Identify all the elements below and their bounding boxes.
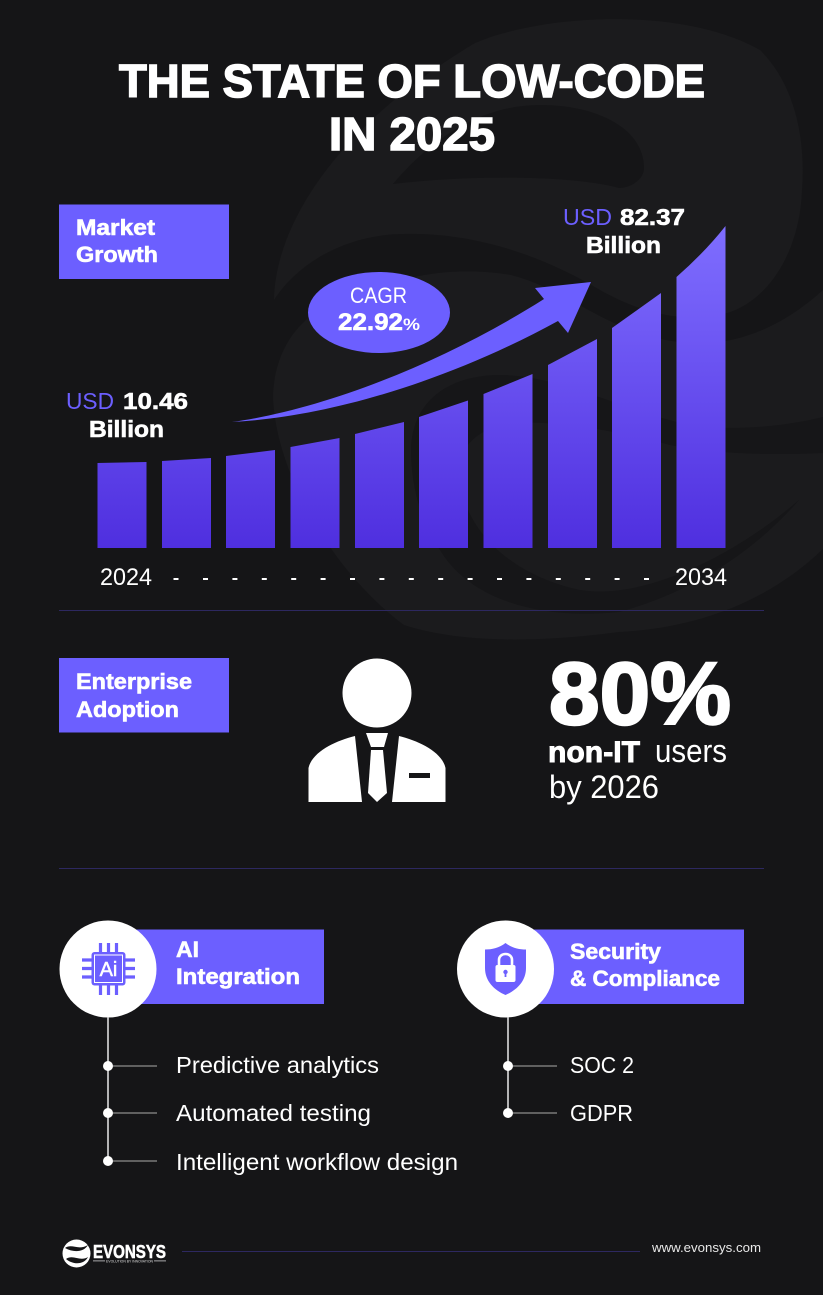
- callout: CAGR: CAGR: [350, 283, 407, 308]
- label: USD 82.37 Billion: Billion: [586, 232, 661, 258]
- heading: AI integration: [130, 930, 324, 1004]
- heading: enterprise adoption: [59, 658, 229, 732]
- heading: enterprise adoption: Enterprise: [76, 669, 192, 694]
- stat: 80% non-IT users by 2026: users: [655, 733, 727, 769]
- callout: CAGR: 22.92: [338, 309, 403, 336]
- icon: business person: [308, 658, 446, 802]
- heading: enterprise adoption: Adoption: [76, 697, 179, 722]
- icon: AI chip: [60, 920, 156, 1018]
- label: USD 10.46 Billion: 10.46: [123, 388, 188, 414]
- list: security items: [503, 1017, 634, 1126]
- icon: shield with padlock: [457, 920, 554, 1018]
- logo: Evonsys: EVOLUTION BY INNOVATION: [106, 1260, 153, 1264]
- heading: market growth: [59, 204, 229, 279]
- website url: www.evonsys.com: [651, 1241, 761, 1255]
- logo: Evonsys: EVONSYS: [93, 1241, 166, 1262]
- list: AI integration items: Intelligent workflow design: [176, 1149, 458, 1175]
- bar chart: market size 2024 to 2034: [98, 226, 726, 548]
- stat: 80% non-IT users by 2026: [548, 644, 731, 805]
- callout: CAGR: %: [403, 315, 420, 334]
- label: USD 10.46 Billion: Billion: [89, 416, 164, 442]
- footer: [62, 1240, 761, 1268]
- list: AI integration items: Predictive analytics: [176, 1052, 379, 1078]
- panel: AI integration: [60, 920, 458, 1175]
- label: USD 82.37 Billion: USD: [563, 204, 612, 230]
- icon: AI chip: Ai: [100, 959, 117, 981]
- panel: enterprise adoption: [59, 644, 731, 805]
- heading: AI integration: Integration: [176, 964, 300, 989]
- stat: 80% non-IT users by 2026: non-IT: [548, 736, 640, 769]
- timeline axis: [100, 564, 727, 591]
- list: security items: GDPR: [570, 1100, 633, 1126]
- heading: security and compliance: [530, 930, 744, 1004]
- label: USD 10.46 Billion: USD: [66, 388, 114, 414]
- timeline axis: 2024: [100, 564, 152, 591]
- title: IN 2025: [329, 108, 495, 160]
- heading: security and compliance: & Compliance: [570, 966, 720, 991]
- label: USD 82.37 Billion: 82.37: [620, 204, 685, 230]
- timeline axis: 2034: [675, 564, 727, 591]
- title: [119, 55, 705, 160]
- stat: 80% non-IT users by 2026: 80%: [549, 644, 731, 743]
- list: security items: SOC 2: [570, 1052, 634, 1078]
- heading: AI integration: AI: [176, 937, 199, 962]
- label: USD 10.46 Billion: [66, 388, 188, 442]
- logo: Evonsys: [62, 1240, 166, 1268]
- stat: 80% non-IT users by 2026: by 2026: [549, 769, 659, 805]
- arrow: growth trend: [232, 282, 591, 422]
- callout: CAGR: [308, 272, 450, 353]
- heading: market growth: Market: [76, 215, 156, 240]
- background watermark swirl: [273, 19, 823, 639]
- label: USD 82.37 Billion: [563, 204, 685, 258]
- panel: market growth: [59, 204, 727, 591]
- list: AI integration items: [103, 1017, 458, 1175]
- heading: market growth: Growth: [76, 242, 158, 267]
- list: AI integration items: Automated testing: [176, 1100, 371, 1126]
- title: THE STATE OF LOW-CODE: [119, 55, 705, 107]
- panel: security and compliance: [457, 920, 744, 1126]
- heading: security and compliance: Security: [570, 939, 662, 964]
